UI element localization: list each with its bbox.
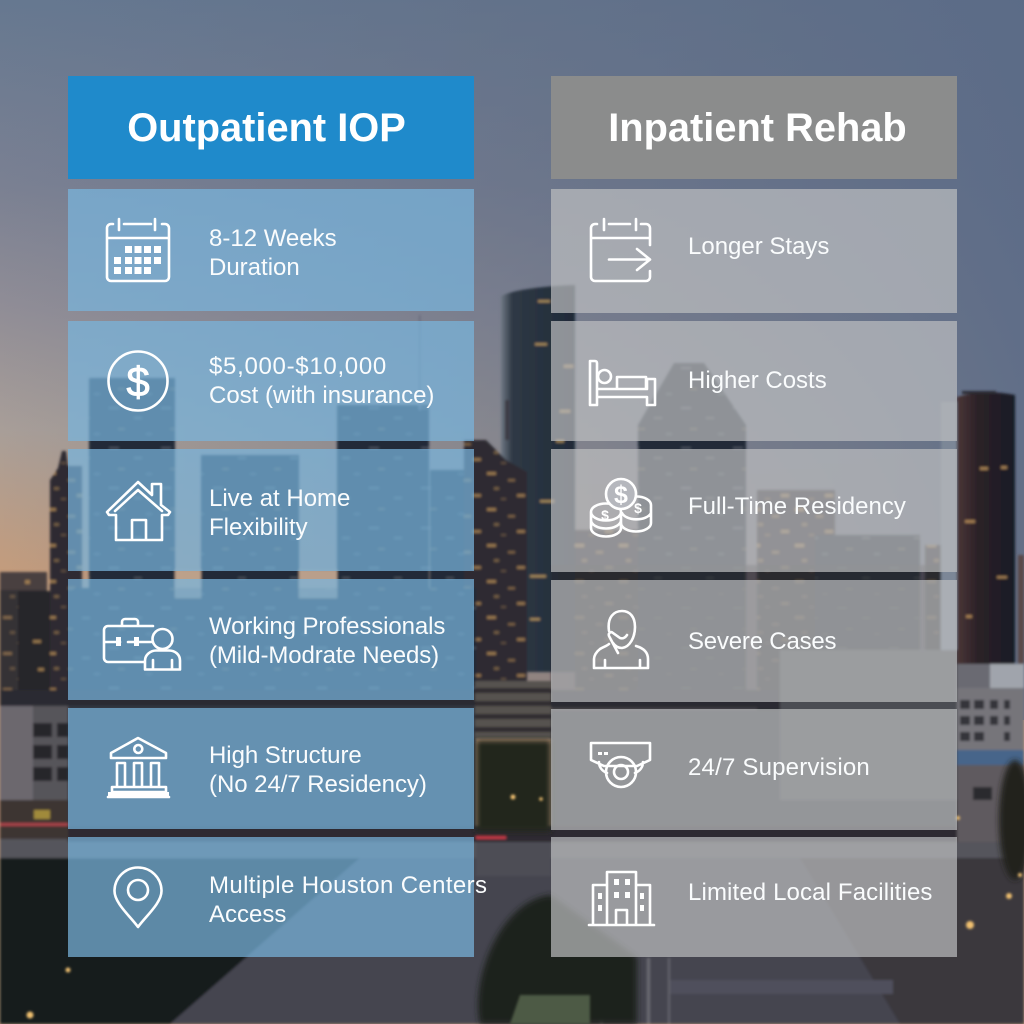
icon: briefcase and person	[102, 618, 182, 671]
text: Higher Costs: Higher Costs	[688, 367, 827, 394]
icon: location pin	[113, 866, 163, 928]
text: Multiple Houston Centers Access	[209, 872, 487, 928]
icon: hospital building	[588, 870, 656, 926]
row: cost	[68, 321, 474, 441]
heading: Outpatient IOP: Outpatient IOP	[127, 106, 406, 150]
row: high structure	[68, 708, 474, 829]
text: Multiple Houston Centers Access: Access	[209, 901, 286, 928]
text: Longer Stays: Longer Stays	[688, 233, 829, 260]
row: access	[68, 837, 474, 957]
icon: stacked coins: $	[614, 481, 628, 509]
row: severe cases	[551, 580, 957, 702]
row: higher costs	[551, 321, 957, 441]
row: working professionals	[68, 579, 474, 700]
icon: dome security camera	[590, 742, 652, 788]
row: longer stays	[551, 189, 957, 313]
text: Live at Home Flexibility: Live at Home	[209, 485, 350, 512]
icon: columned building	[106, 736, 170, 798]
text: 8-12 Weeks Duration: Duration	[209, 254, 300, 281]
text: Limited Local Facilities: Limited Local Facilities	[688, 879, 933, 906]
text: Working Professionals (Mild-Modrate Needs): Working Professionals	[209, 613, 445, 640]
icon: person with hand on face	[592, 610, 650, 670]
heading: Inpatient Rehab: Inpatient Rehab	[608, 106, 907, 150]
text: High Structure (No 24/7 Residency): (No 24/7 Residency)	[209, 771, 427, 798]
icon: dollar coin	[107, 350, 169, 412]
icon: house	[106, 480, 172, 542]
text: $5,000-$10,000 Cost (with insurance): $5,000-$10,000	[209, 353, 387, 380]
row: live at home	[68, 449, 474, 571]
text: Full-Time Residency: Full-Time Residency	[688, 493, 906, 520]
row: full-time residency	[551, 449, 957, 572]
icon: calendar grid	[106, 218, 170, 282]
heading: Inpatient Rehab	[551, 76, 957, 179]
text: $5,000-$10,000 Cost (with insurance): Cost (with insurance)	[209, 382, 434, 409]
text: 8-12 Weeks Duration	[209, 225, 337, 281]
icon: dollar coin: $	[126, 358, 150, 405]
text: 8-12 Weeks Duration: 8-12 Weeks	[209, 225, 337, 252]
icon: calendar with arrow	[590, 218, 652, 282]
panel: outpatient IOP column	[68, 76, 487, 957]
text: High Structure (No 24/7 Residency): High Structure	[209, 742, 362, 769]
row: duration	[68, 189, 474, 311]
text: Live at Home Flexibility	[209, 485, 350, 541]
text: $5,000-$10,000 Cost (with insurance)	[209, 353, 434, 409]
icon: stacked coins: $	[634, 500, 642, 516]
text: Working Professionals (Mild-Modrate Needs): (Mild-Modrate Needs)	[209, 642, 439, 669]
icon: bed	[588, 360, 656, 406]
text: Live at Home Flexibility: Flexibility	[209, 514, 308, 541]
text: Severe Cases: Severe Cases	[688, 628, 836, 655]
icon: stacked coins: $	[601, 507, 609, 523]
row: limited local facilities	[551, 837, 957, 957]
row: 24/7 supervision	[551, 709, 957, 830]
text: 24/7 Supervision: 24/7 Supervision	[688, 754, 870, 781]
text: Multiple Houston Centers Access: Multiple Houston Centers	[209, 872, 487, 899]
text: High Structure (No 24/7 Residency)	[209, 742, 427, 798]
text: Working Professionals (Mild-Modrate Needs)	[209, 613, 445, 669]
icon: stacked coins	[590, 478, 652, 538]
panel: inpatient rehab column	[551, 76, 957, 957]
heading: Outpatient IOP	[68, 76, 474, 179]
